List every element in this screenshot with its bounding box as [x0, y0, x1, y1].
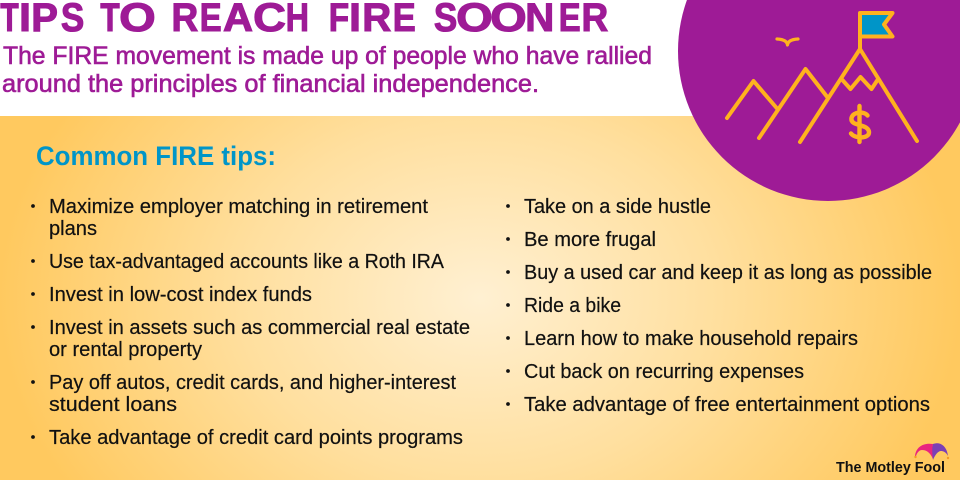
list: right column tips: Take on a side hustle	[524, 196, 711, 218]
subtitle: The FIRE movement is made up of people who have rallied	[3, 42, 652, 70]
list: left column tips: Pay off autos, credit cards, and higher-interest	[49, 372, 456, 394]
list: left column tips: Use tax-advantaged accounts like a Roth IRA	[49, 251, 445, 273]
list: right column tips	[506, 196, 932, 416]
list: left column tips: plans	[49, 218, 97, 240]
list: left column tips: Invest in assets such as commercial real estate	[49, 317, 470, 339]
title	[0, 0, 608, 40]
list: right column tips: Ride a bike	[524, 295, 621, 317]
icon: purple circle with mountains	[678, 0, 960, 201]
background panel	[0, 116, 960, 480]
list: left column tips: Invest in low-cost index funds	[49, 284, 312, 306]
list: right column tips: Take advantage of free entertainment options	[524, 394, 930, 416]
list: left column tips: or rental property	[49, 339, 202, 361]
list: left column tips: Take advantage of credit card points programs	[49, 427, 463, 449]
logo: The Motley Fool	[836, 443, 949, 476]
list: left column tips: student loans	[49, 394, 177, 416]
list: right column tips: Buy a used car and keep it as long as possible	[524, 262, 932, 284]
list: right column tips: Learn how to make household repairs	[524, 328, 858, 350]
logo: The Motley Fool: The Motley Fool	[836, 459, 945, 476]
subtitle	[2, 42, 652, 98]
list: right column tips: Cut back on recurring expenses	[524, 361, 804, 383]
subtitle: around the principles of financial independence.	[2, 70, 539, 98]
heading: common FIRE tips: Common FIRE tips:	[36, 141, 276, 171]
list: right column tips: Be more frugal	[524, 229, 656, 251]
list: left column tips: Maximize employer matching in retirement	[49, 196, 428, 218]
list: left column tips	[31, 196, 470, 449]
